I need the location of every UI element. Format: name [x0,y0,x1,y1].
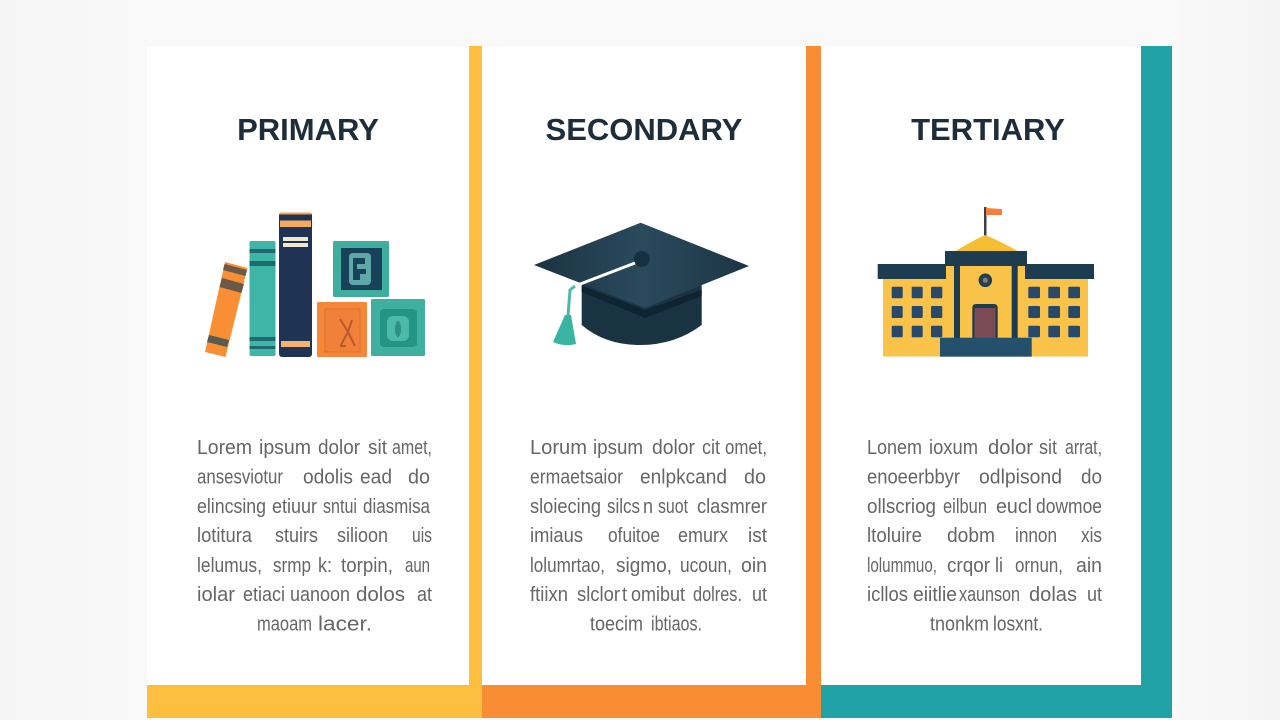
text block: tertiary: sit [1039,437,1057,459]
text block: primary: elincsing [197,496,266,518]
text block: primary: iolar [197,584,235,606]
text block: secondary: Lorum [530,437,587,459]
panel: secondary [482,46,821,718]
text block: primary: odolis [303,466,353,488]
text block: secondary: cit [702,437,720,459]
text block: tertiary: ltoluire [867,525,922,547]
text block: primary: uis [412,525,432,547]
text block: primary: ansesviotur [197,466,283,488]
text block: tertiary: enoeerbbyr [867,466,960,488]
text block: primary: srmp [273,555,311,577]
text block: secondary: dolres. [693,584,742,606]
text block: tertiary: li [995,555,1003,577]
text block: tertiary: dowmoe [1036,496,1102,518]
text block: tertiary: xaunson [959,584,1020,606]
text block: secondary: do [744,466,766,488]
text block: secondary: sloiecing [530,496,601,518]
text block: primary: do [408,466,430,488]
text block: primary: diasmisa [363,496,431,518]
text block: tertiary: ollscriog [867,496,936,518]
text block: primary: etiuur [272,496,317,518]
text block: secondary: ofuitoe [608,525,660,547]
text block: primary: aun [405,555,430,577]
text block: tertiary: odlpisond [979,466,1062,488]
text block: tertiary: eilbun [943,496,987,518]
text block: primary: dolor [318,437,360,459]
text block: secondary: ftiixn [530,584,568,606]
text block: secondary: oin [741,555,767,577]
text block: primary: lotitura [197,525,253,547]
text block: tertiary: dolor [988,437,1033,459]
text block: primary: lacer. [318,614,372,636]
text block: tertiary: Lonem [867,437,922,459]
heading: tertiary: TERTIARY [911,112,1065,147]
text block: secondary: lolumrtao, [530,555,605,577]
text block: tertiary: do [1081,466,1102,488]
text block: primary: lelumus, [197,555,262,577]
text block: secondary: t [622,584,627,606]
text block: primary: sntui [323,496,357,518]
text block: tertiary: lolummuo, [867,555,937,577]
text block: primary: torpin, [341,555,393,577]
icon: university building [878,207,1094,357]
panel: primary [147,46,483,718]
text block: tertiary: icllos [867,584,908,606]
text block: secondary: ucoun, [680,555,732,577]
icon: books and blocks [205,212,425,357]
text block: primary: ipsum [259,437,311,459]
text block: secondary: imiaus [530,525,583,547]
text block: tertiary: ioxum [929,437,978,459]
heading: secondary: SECONDARY [546,112,742,147]
text block: tertiary: losxnt. [993,614,1043,636]
text block: secondary: ut [752,584,767,606]
text block: primary [197,437,432,636]
text block: secondary [530,437,767,636]
text block: tertiary [867,437,1102,636]
text block: secondary: slclor [577,584,620,606]
text block: secondary: ibtiaos. [651,614,702,636]
text block: secondary: clasmrer [697,496,767,518]
text block: secondary: emurx [678,525,728,547]
text block: primary: sit [368,437,387,459]
text block: secondary: sigmo, [616,555,672,577]
text block: tertiary: ornun, [1015,555,1063,577]
text block: primary: uanoon [290,584,350,606]
text block: primary: Lorem [197,437,252,459]
text block: tertiary: crqor [947,555,990,577]
text block: tertiary: innon [1015,525,1057,547]
text block: secondary: n [643,496,653,518]
text block: primary: k: [318,555,332,577]
text block: secondary: dolor [652,437,695,459]
text block: tertiary: arrat, [1065,437,1102,459]
text block: tertiary: tnonkm [930,614,989,636]
text block: tertiary: ut [1087,584,1102,606]
text block: tertiary: eiitlie [913,584,957,606]
text block: secondary: omibut [631,584,685,606]
text block: secondary: enlpkcand [640,466,727,488]
text block: tertiary: dobm [947,525,995,547]
text block: primary: dolos [356,584,405,606]
text block: secondary: silcs [607,496,640,518]
text block: tertiary: eucl [996,496,1032,518]
text block: secondary: toecim [590,614,643,636]
text block: tertiary: dolas [1029,584,1077,606]
text block: secondary: omet, [725,437,767,459]
text block: primary: maoam [257,614,312,636]
text block: primary: etiaci [243,584,285,606]
icon: graduation cap [534,222,749,346]
text block: primary: stuirs [275,525,318,547]
text block: secondary: suot [658,496,688,518]
panel: tertiary [821,46,1172,718]
text block: primary: ead [360,466,392,488]
text block: primary: at [417,584,432,606]
heading: primary: PRIMARY [237,112,379,147]
text block: tertiary: xis [1081,525,1102,547]
text block: primary: silioon [337,525,388,547]
text block: tertiary: ain [1076,555,1102,577]
text block: secondary: ist [748,525,767,547]
text block: secondary: ermaetsaior [530,466,623,488]
text block: secondary: ipsum [593,437,643,459]
